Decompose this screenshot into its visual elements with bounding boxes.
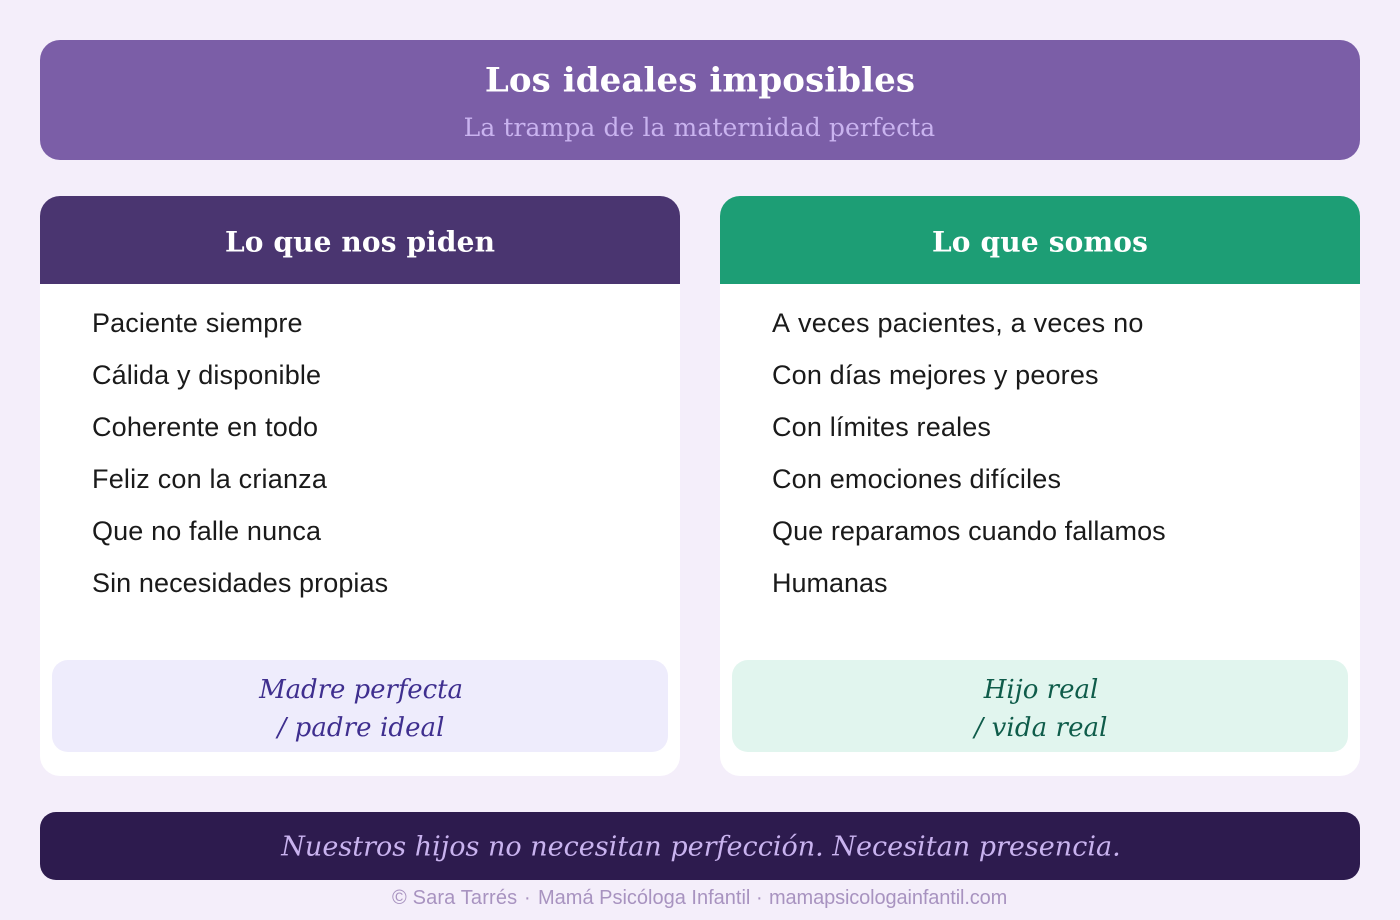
- list of realities: Con días mejores y peores: [772, 360, 1099, 390]
- callout: madre perfecta: [52, 660, 668, 752]
- footer credit: mamapsicologainfantil.com: [769, 887, 1007, 909]
- callout: madre perfecta: / padre ideal: [274, 713, 445, 743]
- footer credit: ·: [756, 887, 763, 909]
- panel heading: [40, 196, 680, 284]
- callout: hijo real: / vida real: [971, 713, 1108, 743]
- closing message banner: Nuestros hijos no necesitan perfección. Necesitan presencia.: [280, 832, 1121, 862]
- panel: lo que nos piden: [40, 196, 680, 776]
- callout: madre perfecta: Madre perfecta: [258, 675, 463, 705]
- list of realities: [772, 308, 1166, 598]
- list of demands: Coherente en todo: [92, 412, 318, 442]
- panel heading: Lo que nos piden: [225, 226, 495, 258]
- list of realities: A veces pacientes, a veces no: [772, 308, 1144, 338]
- list of realities: Que reparamos cuando fallamos: [772, 516, 1166, 546]
- list of demands: Sin necesidades propias: [92, 568, 388, 598]
- list of demands: Feliz con la crianza: [92, 464, 328, 494]
- list of realities: Con emociones difíciles: [772, 464, 1061, 494]
- closing message banner: [40, 812, 1360, 880]
- header banner: [40, 40, 1360, 160]
- list of demands: Paciente siempre: [92, 308, 303, 338]
- list of demands: Que no falle nunca: [92, 516, 322, 546]
- title: Los ideales imposibles: [485, 60, 915, 100]
- panel: lo que somos: [720, 196, 1360, 776]
- footer credit: Mamá Psicóloga Infantil: [538, 887, 750, 909]
- list of realities: Con límites reales: [772, 412, 991, 442]
- callout: hijo real: Hijo real: [983, 675, 1098, 705]
- subtitle: La trampa de la maternidad perfecta: [464, 113, 935, 142]
- footer credit: © Sara Tarrés: [392, 887, 517, 909]
- list of demands: Cálida y disponible: [92, 360, 321, 390]
- panel heading: Lo que somos: [932, 226, 1148, 258]
- callout: hijo real: [732, 660, 1348, 752]
- footer credit: ·: [524, 887, 531, 909]
- list of realities: Humanas: [772, 568, 888, 598]
- list of demands: [92, 308, 388, 598]
- panel heading: [720, 196, 1360, 284]
